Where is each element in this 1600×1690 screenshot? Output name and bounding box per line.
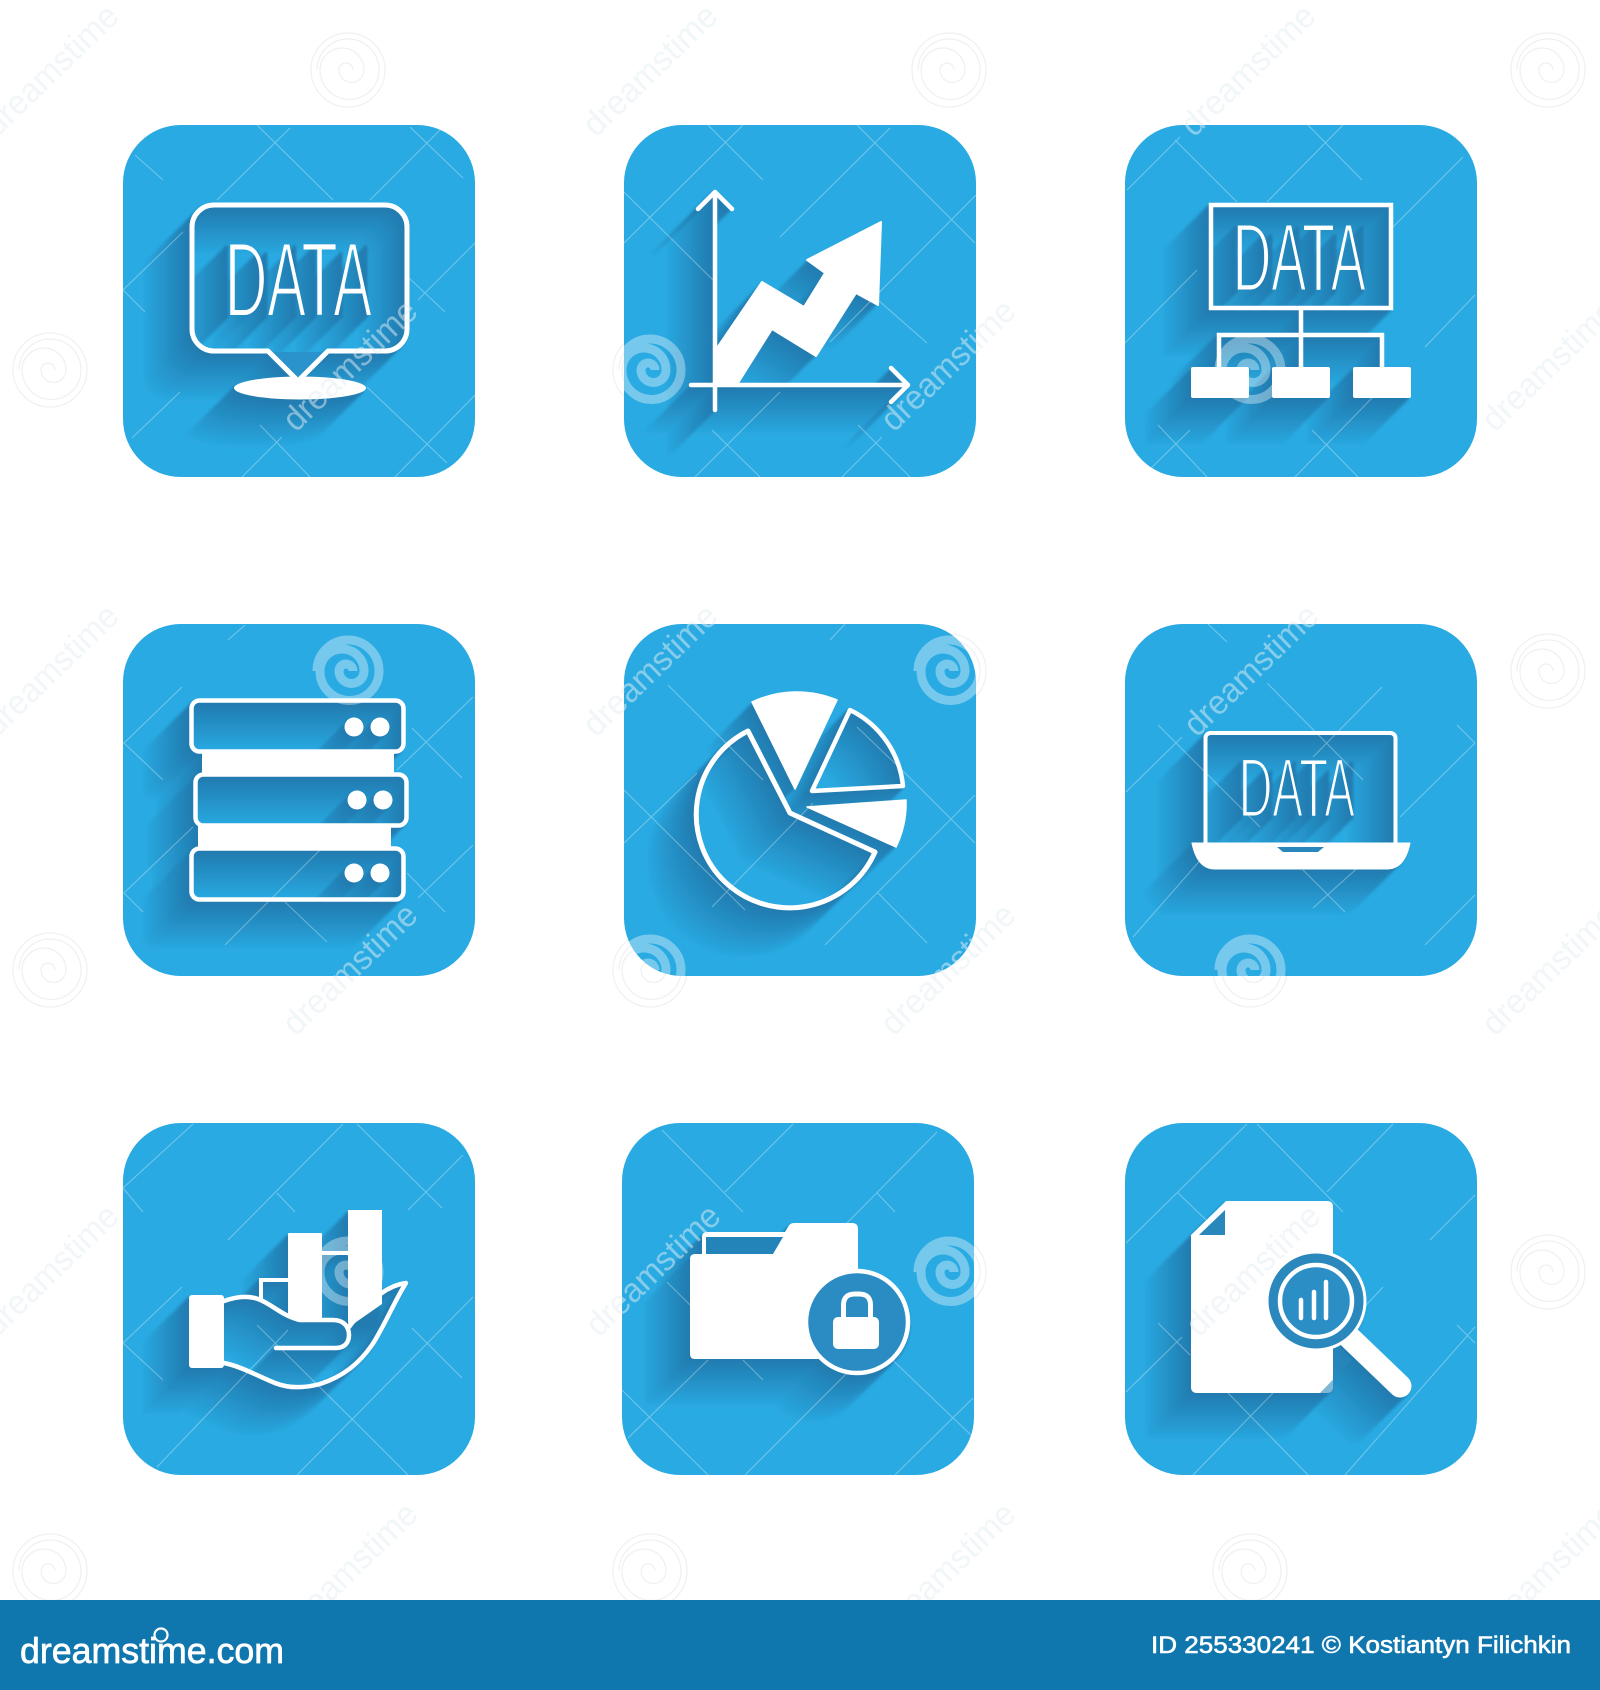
- watermark: dreamstime diagonal text: dreamstime: [873, 1495, 1023, 1642]
- watermark: dreamstime diagonal text: dreamstime: [575, 597, 725, 744]
- panel: document search tile: [1125, 1123, 1477, 1475]
- footer bar: [0, 1600, 1600, 1690]
- watermark: dreamstime diagonal text: dreamstime: [275, 1495, 425, 1642]
- icon: exploded pie chart: [696, 692, 906, 908]
- footer logo: dreamstime.com: dreamstime.com: [20, 1630, 284, 1671]
- panel: locked folder tile: [622, 1123, 974, 1475]
- watermark: spirals over tiles: [317, 339, 1281, 1302]
- footer credit: image id and author: ID 255330241 © Kostiantyn Filichkin: [1151, 1632, 1571, 1659]
- icon: DATA board with three child nodes: DATA: [1233, 203, 1366, 312]
- watermark: dreamstime diagonal text: dreamstime: [873, 896, 1023, 1043]
- panel: laptop tile: [1125, 624, 1477, 976]
- icon: speech bubble pin with DATA: DATA: [225, 220, 372, 340]
- icon: axes with zigzag growth arrow: [691, 192, 908, 410]
- panel: server rack tile: [123, 624, 475, 976]
- watermark: dreamstime diagonal text: dreamstime: [1176, 597, 1326, 744]
- icon: folder with padlock badge: [690, 1223, 908, 1373]
- watermark: dreamstime diagonal text: dreamstime: [578, 1197, 728, 1344]
- icon: laptop showing DATA: [1192, 733, 1410, 869]
- icon: three stacked servers: [192, 700, 406, 900]
- panel: hand holding bar chart tile: [123, 1123, 475, 1475]
- panel: rising chart tile: [624, 125, 976, 477]
- icon: DATA board with three child nodes: [1191, 203, 1411, 398]
- panel: data hierarchy tile: [1125, 125, 1477, 477]
- watermark: dreamstime diagonal text: dreamstime: [873, 292, 1023, 439]
- watermark: dreamstime diagonal text: dreamstime: [275, 896, 425, 1043]
- panel: pie chart tile: [624, 624, 976, 976]
- watermark: dreamstime diagonal text: dreamstime: [1178, 1197, 1328, 1344]
- icon: speech bubble pin with DATA: [192, 205, 407, 400]
- icon: document under magnifying glass with bars: [1191, 1201, 1400, 1393]
- icon: hand with rising bars: [189, 1210, 406, 1387]
- watermark: dreamstime diagonal text: dreamstime: [275, 292, 425, 439]
- icon: laptop showing DATA: DATA: [1239, 741, 1355, 835]
- panel: data speech bubble tile: [123, 125, 475, 477]
